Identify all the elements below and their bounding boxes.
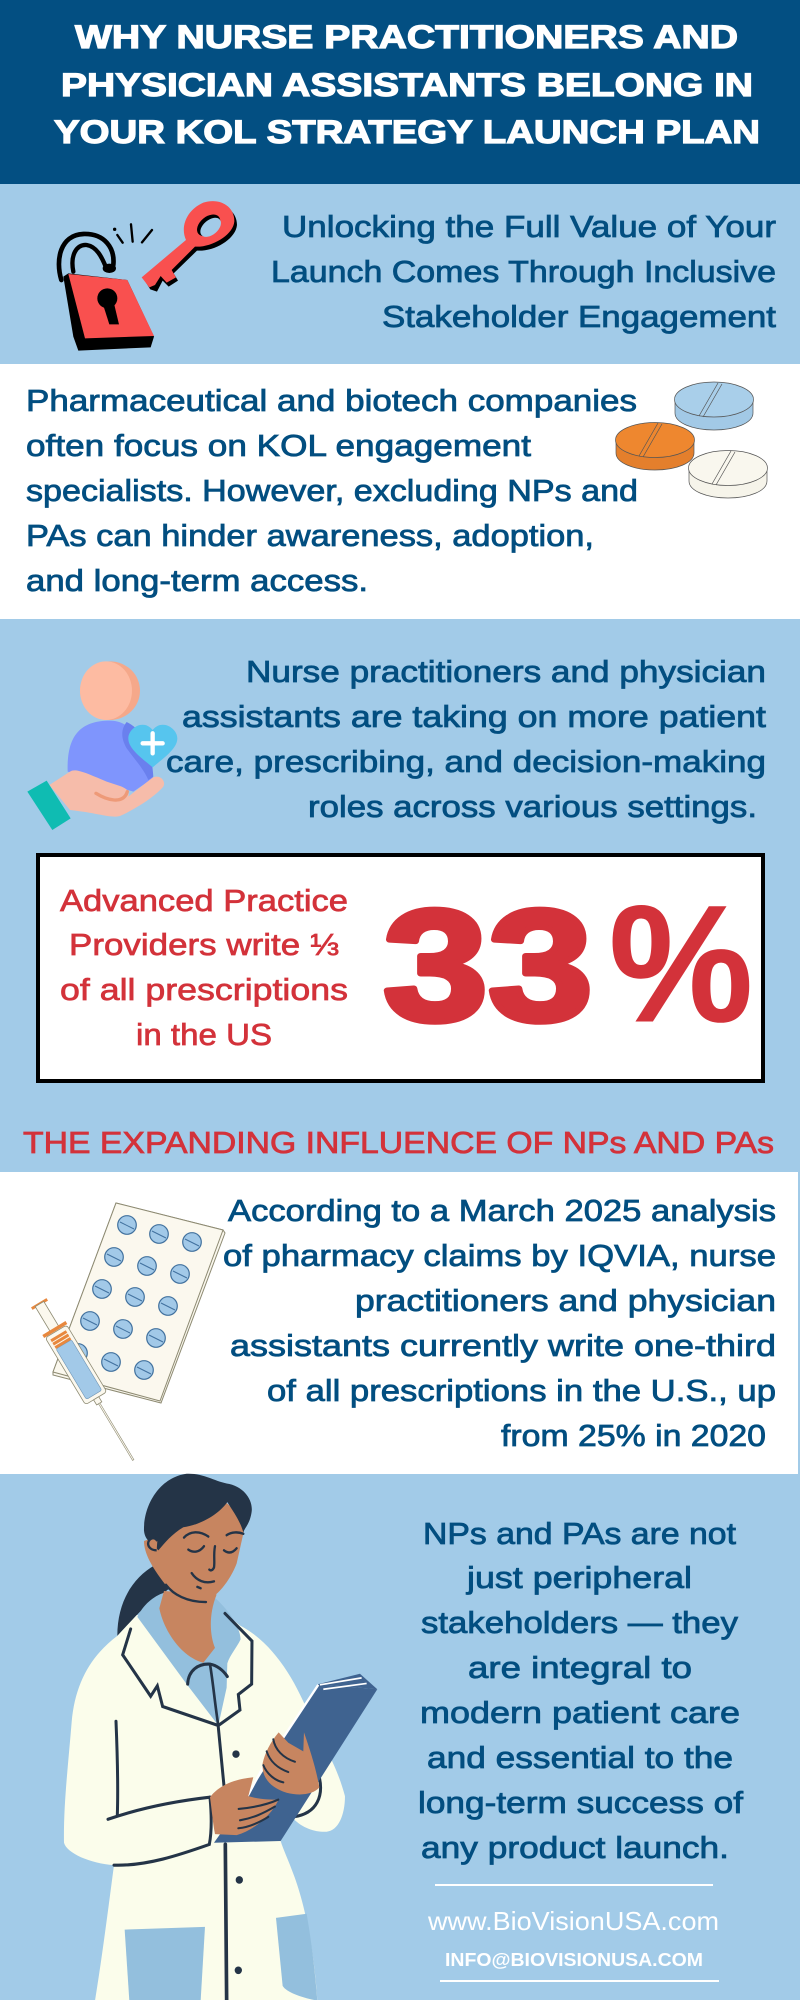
lower hand bbox=[210, 1777, 279, 1835]
ponytail bbox=[117, 1565, 168, 1636]
text block: integral to patient care: just peripheral bbox=[466, 1560, 692, 1595]
panel: IQVIA analysis bbox=[0, 1172, 798, 1474]
intro text bbox=[26, 383, 638, 598]
icon: hand holding person with heart bbox=[27, 661, 177, 830]
text block: nurse practitioners roles bbox=[166, 654, 766, 824]
upper hand bbox=[263, 1732, 319, 1794]
text block: integral to patient care: stakeholders — they bbox=[421, 1605, 739, 1640]
icon: three pills bbox=[616, 382, 768, 498]
intro text: often focus on KOL engagement bbox=[26, 428, 531, 463]
text block: nurse practitioners roles: Nurse practitioners and physician bbox=[246, 654, 766, 689]
panel: title banner bbox=[0, 0, 800, 184]
icon: padlock and key bbox=[59, 201, 237, 351]
subheading: unlocking the full value: Launch Comes Through Inclusive bbox=[271, 254, 776, 289]
title: YOUR KOL STRATEGY LAUNCH PLAN bbox=[54, 114, 760, 150]
text block: integral to patient care: any product launch. bbox=[421, 1830, 729, 1865]
analysis text: of all prescriptions in the U.S., up bbox=[267, 1373, 776, 1408]
finger lines bbox=[238, 1739, 295, 1828]
big number bbox=[383, 872, 753, 1057]
shirt bbox=[137, 1593, 241, 1725]
callout label: in the US bbox=[136, 1017, 272, 1052]
text block: nurse practitioners roles: assistants are taking on more patient bbox=[182, 699, 766, 734]
analysis text: from 25% in 2020 bbox=[501, 1418, 766, 1453]
text block: integral to patient care: NPs and PAs are not bbox=[423, 1516, 736, 1551]
face bbox=[144, 1503, 244, 1602]
coat outlines bbox=[108, 1613, 321, 2000]
text block: nurse practitioners roles: roles across various settings. bbox=[308, 789, 757, 824]
text block: integral to patient care: and essential to the bbox=[427, 1740, 733, 1775]
callout: 33 percent box bbox=[38, 855, 763, 1081]
text block: nurse practitioners roles: care, prescribing, and decision-making bbox=[166, 744, 766, 779]
intro text: specialists. However, excluding NPs and bbox=[26, 473, 638, 508]
callout label: Providers write ⅓ bbox=[69, 927, 339, 962]
analysis text: According to a March 2025 analysis bbox=[228, 1193, 776, 1228]
analysis text bbox=[223, 1193, 776, 1453]
buttons bbox=[232, 1750, 243, 1974]
title: WHY NURSE PRACTITIONERS AND bbox=[75, 19, 738, 55]
website: www.BioVisionUSA.com bbox=[427, 1906, 719, 1936]
illustration: nurse holding book bbox=[64, 1474, 377, 2000]
coat bbox=[64, 1612, 345, 2000]
text block: integral to patient care: modern patient care bbox=[420, 1695, 740, 1730]
ear bbox=[148, 1538, 157, 1550]
footer contact bbox=[427, 1884, 719, 1982]
panel: pharma intro bbox=[0, 364, 800, 619]
callout label: Advanced Practice bbox=[60, 883, 348, 918]
facial features bbox=[166, 1532, 243, 1602]
intro text: PAs can hinder awareness, adoption, bbox=[26, 518, 594, 553]
icon: blister pack bbox=[53, 1203, 225, 1403]
intro text: and long-term access. bbox=[26, 563, 368, 598]
neck bbox=[159, 1591, 217, 1663]
text block: integral to patient care: long-term success of bbox=[418, 1785, 743, 1820]
hair bbox=[144, 1474, 252, 1550]
title bbox=[54, 19, 760, 150]
intro text: Pharmaceutical and biotech companies bbox=[26, 383, 637, 418]
subheading: unlocking the full value: Unlocking the Full Value of Your bbox=[282, 209, 776, 244]
heading: expanding influence: THE EXPANDING INFLUENCE OF NPs AND PAs bbox=[23, 1125, 774, 1160]
big number: % bbox=[609, 872, 753, 1057]
callout label bbox=[60, 883, 348, 1052]
book bbox=[214, 1684, 377, 1843]
analysis text: of pharmacy claims by IQVIA, nurse bbox=[223, 1238, 776, 1273]
callout label: of all prescriptions bbox=[60, 972, 348, 1007]
text block: integral to patient care bbox=[418, 1516, 743, 1865]
pockets bbox=[125, 1927, 205, 2000]
analysis text: practitioners and physician bbox=[355, 1283, 776, 1318]
big number: 33 bbox=[383, 878, 593, 1054]
text block: integral to patient care: are integral to bbox=[468, 1650, 692, 1685]
analysis text: assistants currently write one-third bbox=[230, 1328, 776, 1363]
title: PHYSICIAN ASSISTANTS BELONG IN bbox=[61, 67, 753, 103]
icon: syringe bbox=[27, 1296, 145, 1467]
subheading: unlocking the full value bbox=[271, 209, 776, 334]
email: INFO@BIOVISIONUSA.COM bbox=[445, 1950, 703, 1970]
subheading: unlocking the full value: Stakeholder Engagement bbox=[382, 299, 776, 334]
